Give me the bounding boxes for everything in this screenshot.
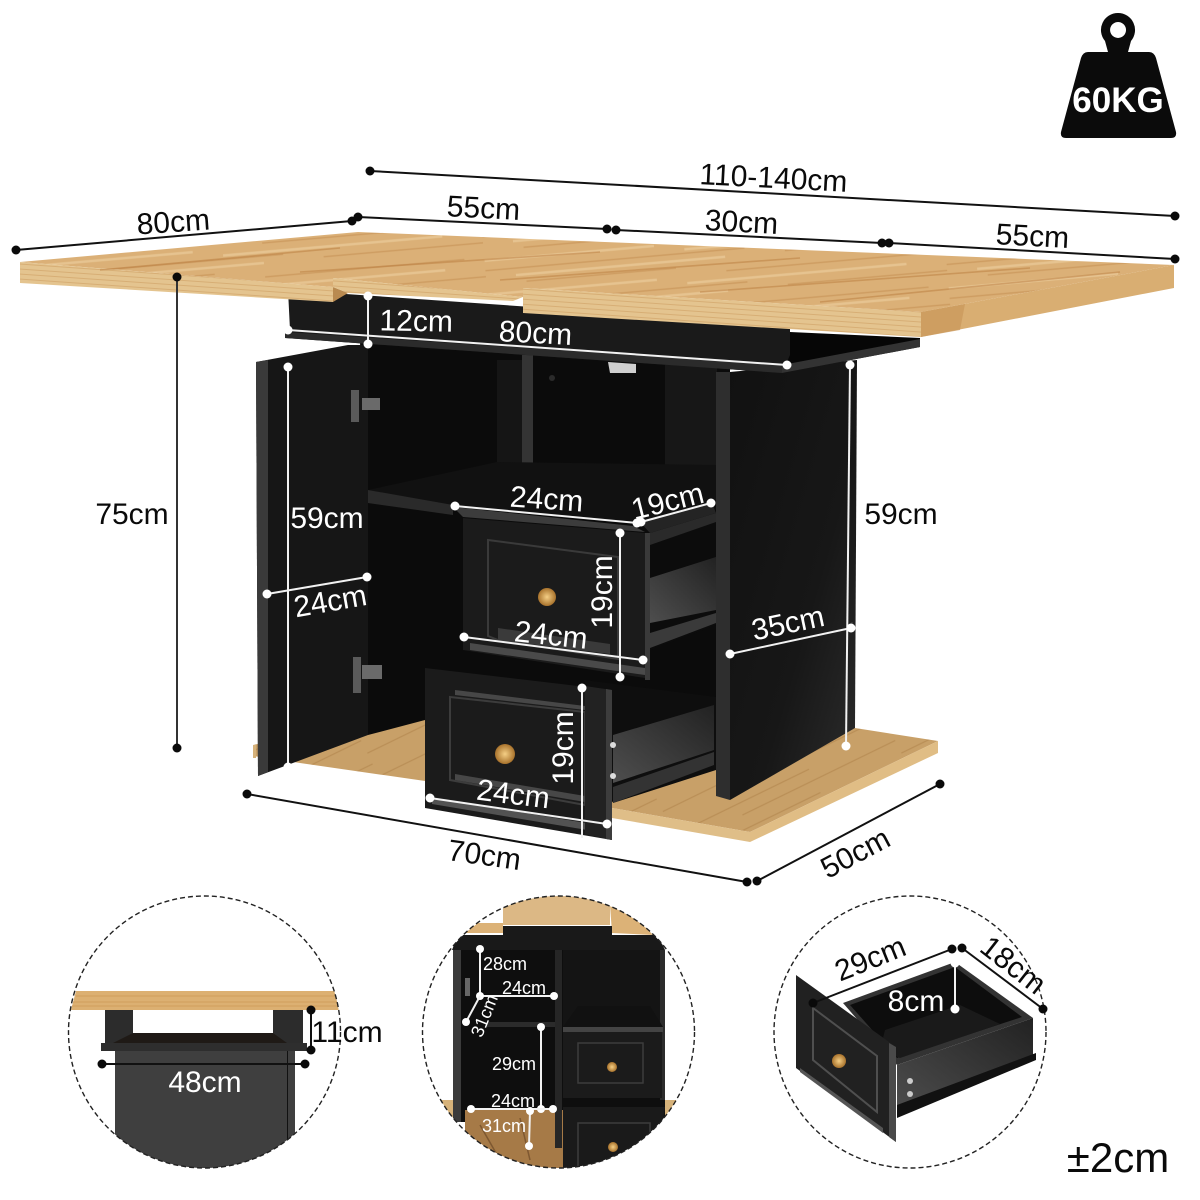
furniture: wooden tabletop: [20, 232, 1174, 337]
dimension: door height 59cm: [284, 362, 364, 772]
dimension: lower 31cm: 31cm: [482, 1116, 526, 1136]
dimension: center 30cm: 30cm: [704, 204, 779, 241]
dimension: apron length 80cm: [284, 315, 792, 370]
dimension: upper 24cm: [476, 978, 558, 1000]
dimension: door width 24cm: [262, 572, 372, 624]
dimension: apron length 80cm: 80cm: [498, 315, 573, 352]
dimension: apron height 12cm: [364, 292, 453, 348]
panel: detail circle open drawer: [774, 896, 1052, 1168]
dimension: upper drawer width 24cm: [460, 615, 648, 664]
dimension: width 110-140cm: [366, 158, 1180, 220]
dimension: side panel 35cm: [726, 600, 856, 658]
dimension: lower drawer width 24cm: 24cm: [475, 774, 552, 815]
dimension: apron height 12cm: 12cm: [379, 304, 453, 339]
tolerance note: ±2cm: [1067, 1134, 1169, 1181]
dimension: upper drawer width 24cm: 24cm: [513, 615, 589, 656]
dimension: 48cm: [98, 1060, 310, 1099]
dimension: lower drawer height 19cm: 19cm: [547, 711, 580, 785]
icon: 60KG weight: 60KG: [1072, 81, 1164, 120]
dimension: side panel 35cm: 35cm: [749, 600, 827, 647]
dimension: right leaf 55cm: [884, 218, 1180, 264]
dimension: shelf width 24cm: 24cm: [509, 481, 584, 519]
furniture: open door: [256, 345, 382, 776]
dimension: depth 80cm: [12, 204, 356, 254]
dimension: lower 31cm: [482, 1107, 534, 1150]
icon: upper drawer knob: [538, 588, 556, 606]
dimension: 11cm: 11cm: [311, 1016, 383, 1049]
dimension: upper drawer height 19cm: 19cm: [586, 555, 619, 629]
dimension: left leaf 55cm: 55cm: [446, 190, 521, 227]
dimension: drawer 8cm: 8cm: [888, 985, 944, 1018]
dimension: upper 24cm: 24cm: [502, 978, 546, 998]
dimension: base depth 50cm: [752, 780, 944, 886]
dimension: center 30cm: [612, 204, 886, 248]
panel: detail circle front view: [422, 890, 694, 1173]
dimension: base length 70cm: [242, 790, 752, 886]
dimension: right side 59cm: [842, 360, 938, 750]
icon: lower drawer knob: [495, 744, 515, 764]
panel: detail circle side view: [68, 896, 383, 1181]
dimension: door width 24cm: 24cm: [291, 579, 369, 624]
dimension: 48cm: 48cm: [168, 1066, 242, 1099]
furniture: base board: [253, 715, 938, 842]
dimension: lower drawer width 24cm: [426, 774, 612, 828]
dimension: 28cm: [476, 945, 527, 996]
icon: 60KG weight: [1061, 13, 1176, 138]
dimension: 29cm: 29cm: [492, 1054, 536, 1074]
dimension: drawer 8cm: [888, 958, 960, 1018]
dimension: lower 24cm: 24cm: [491, 1091, 535, 1111]
furniture: lower drawer: [425, 668, 716, 840]
dimension: diagonal 31cm: 31cm: [467, 992, 502, 1040]
dimension: shelf depth 19cm: 19cm: [628, 477, 707, 527]
dimension: drawer 29cm: 29cm: [830, 930, 911, 988]
dimension: door height 59cm: 59cm: [290, 502, 364, 535]
dimension: depth 80cm: 80cm: [136, 204, 211, 242]
dimension: base length 70cm: 70cm: [446, 834, 523, 877]
dimension: right leaf 55cm: 55cm: [995, 218, 1070, 255]
furniture: cabinet interior: [360, 340, 730, 802]
dimension: lower drawer height 19cm: [547, 684, 586, 838]
furniture: upper drawer: [453, 503, 716, 680]
furniture: right side panel: [716, 360, 857, 800]
dimension: upper drawer height 19cm: [586, 528, 624, 682]
dimension: width 110-140cm: 110-140cm: [699, 158, 848, 199]
dimension: 28cm: 28cm: [483, 954, 527, 974]
dimension: height 75cm: 75cm: [95, 498, 169, 531]
dimension: right side 59cm: 59cm: [864, 498, 938, 531]
furniture: apron under tabletop: [285, 290, 920, 373]
dimension: 29cm: [492, 1023, 545, 1113]
dimension: base depth 50cm: 50cm: [815, 822, 896, 885]
dimension: height 75cm: [95, 272, 182, 752]
dimension: drawer 29cm: [808, 930, 956, 1008]
dimension: left leaf 55cm: [354, 190, 612, 234]
dimension: drawer 18cm: 18cm: [974, 930, 1052, 1001]
dimension: lower 24cm: [467, 1091, 557, 1113]
dimension: 11cm: [306, 1006, 383, 1054]
dimension: shelf width 24cm: [450, 481, 642, 528]
